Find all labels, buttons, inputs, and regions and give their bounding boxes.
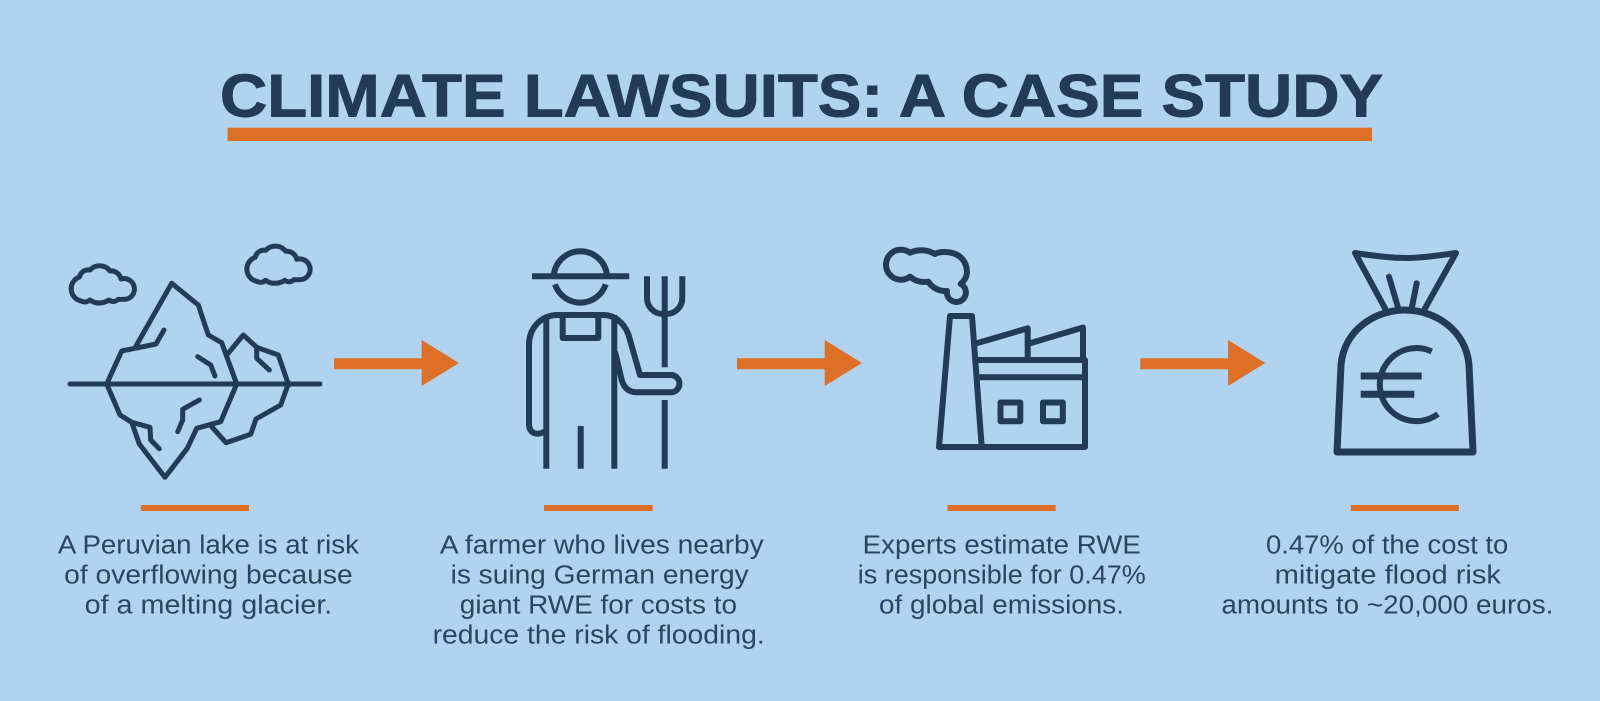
icon: iceberg with clouds: [70, 246, 320, 477]
panel: farmer: [433, 251, 765, 649]
text: farmer description: [433, 531, 765, 649]
panel: factory: [858, 250, 1146, 619]
icon: factory with smoke: [886, 250, 1085, 447]
text: cost description: [1221, 531, 1553, 619]
text: factory description: [858, 531, 1146, 619]
text: glacier description: A Peruvian lake is at risk: [58, 531, 359, 559]
arrow: farmer to factory: [737, 340, 862, 386]
text: factory description: Experts estimate RWE: [863, 531, 1141, 559]
panel: money bag: [1221, 253, 1553, 619]
title: CLIMATE LAWSUITS: A CASE STUDY: [220, 63, 1383, 130]
text: glacier description: of overflowing because: [64, 561, 353, 589]
text: factory description: is responsible for 0.47%: [858, 561, 1146, 589]
text: cost description: 0.47% of the cost to: [1266, 531, 1508, 559]
icon: farmer with pitchfork: [529, 251, 682, 469]
text: farmer description: reduce the risk of flooding.: [433, 621, 765, 649]
arrow: glacier to farmer: [334, 340, 459, 386]
text: glacier description: of a melting glacier.: [85, 591, 332, 619]
text: cost description: amounts to ~20,000 euros.: [1221, 591, 1553, 619]
text: cost description: mitigate flood risk: [1275, 561, 1501, 589]
arrow: factory to money bag: [1140, 340, 1265, 386]
text: glacier description: [58, 531, 359, 619]
text: farmer description: is suing German energy: [451, 561, 749, 589]
text: factory description: of global emissions.: [879, 591, 1124, 619]
icon: euro money bag: [1337, 253, 1473, 452]
panel: glacier: [58, 246, 359, 619]
text: farmer description: giant RWE for costs to: [460, 591, 737, 619]
text: farmer description: A farmer who lives nearby: [440, 531, 764, 559]
